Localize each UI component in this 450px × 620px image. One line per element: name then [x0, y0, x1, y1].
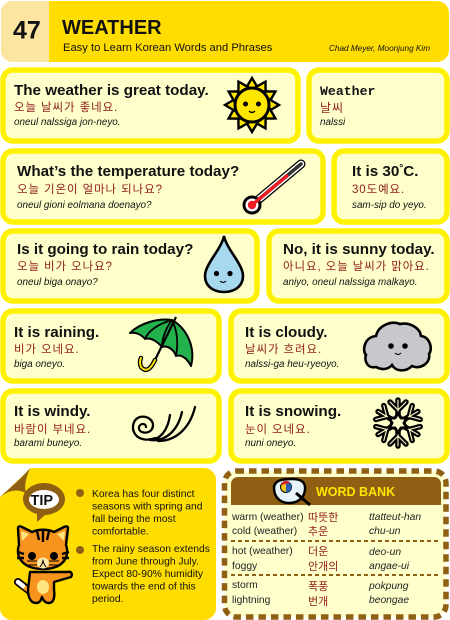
- word list: beongae: [369, 595, 409, 606]
- icon: cat: [17, 526, 72, 603]
- panel: it is raining: 비가 오네요.: [14, 343, 80, 356]
- word list: 폭풍: [308, 580, 328, 593]
- authors: Chad Meyer, Moonjung Kim: [329, 44, 430, 53]
- panel: it is cloudy: It is cloudy.: [245, 324, 327, 341]
- word list: pokpung: [368, 581, 409, 592]
- tip text 2: towards the end of this: [92, 582, 196, 592]
- panel: the weather is great today: The weather is great today.: [14, 82, 209, 99]
- panel: what's the temperature today: 오늘 기온이 얼마나 되나요?: [17, 182, 163, 196]
- word list: ttatteut-han: [369, 512, 421, 523]
- panel: it is 30 degrees: sam-sip do yeyo.: [352, 200, 427, 211]
- panel: it is snowing: nuni oneyo.: [245, 438, 296, 449]
- panel: it is raining: biga oneyo.: [14, 359, 65, 370]
- word list: 더운: [308, 545, 328, 558]
- word list: 따뜻한: [308, 511, 338, 524]
- panel: no it is sunny today: No, it is sunny today.: [283, 241, 435, 258]
- panel: it is 30 degrees: It is 30: [352, 163, 399, 180]
- panel: it is 30 degrees: [334, 151, 447, 222]
- word list: angae-ui: [369, 561, 410, 572]
- word list: foggy: [232, 561, 258, 572]
- panel: it is snowing: [231, 391, 447, 461]
- tip text 2: period.: [92, 594, 123, 605]
- panel: it is raining: It is raining.: [14, 324, 99, 341]
- panel: no it is sunny today: aniyo, oneul nalssiga malkayo.: [283, 277, 418, 288]
- icon: snowflake: [374, 400, 422, 446]
- panel: it is 30 degrees: C.: [403, 163, 418, 180]
- icon: cloud: [364, 323, 431, 370]
- panel: weather vocabulary: Weather: [320, 84, 375, 99]
- word list: deo-un: [369, 547, 401, 558]
- tip speech bubble: TIP: [30, 493, 53, 509]
- panel: it is windy: It is windy.: [14, 403, 91, 420]
- panel: it is windy: [3, 391, 219, 461]
- word list: cold (weather): [232, 526, 297, 537]
- icon: sun: [225, 78, 279, 132]
- tip text 1: seasons with spring and: [92, 502, 203, 512]
- panel: no it is sunny today: [269, 231, 447, 301]
- word bank heading: WORD BANK: [316, 485, 395, 499]
- icon: umbrella: [130, 317, 192, 370]
- panel: what's the temperature today: What’s the temperature today?: [17, 163, 239, 180]
- panel: it is cloudy: 날씨가 흐려요.: [245, 343, 322, 356]
- word list: 추운: [308, 525, 328, 538]
- panel: word bank: [224, 471, 446, 617]
- panel: the weather is great today: 오늘 날씨가 좋네요.: [14, 101, 118, 114]
- page curl: [0, 468, 30, 497]
- panel: is it going to rain today: Is it going to rain today?: [17, 241, 193, 258]
- icon: fan: [274, 479, 310, 505]
- panel: what's the temperature today: [3, 151, 323, 222]
- bullet 2: [76, 546, 84, 554]
- panel: the weather is great today: oneul nalssiga jon-neyo.: [14, 117, 121, 128]
- word list: storm: [232, 580, 258, 591]
- icon: water drop: [205, 236, 243, 292]
- panel: it is windy: 바람이 부네요.: [14, 423, 91, 436]
- panel: no it is sunny today: 아니요, 오늘 날씨가 맑아요.: [283, 259, 430, 273]
- word list: hot (weather): [232, 546, 293, 557]
- lesson number: 47: [13, 16, 41, 44]
- icon: thermometer: [242, 164, 301, 214]
- tip text 2: from June through July.: [92, 556, 199, 568]
- bullet 1: [76, 489, 84, 497]
- word list: 번개: [308, 595, 328, 608]
- word list: chu-un: [369, 526, 401, 537]
- panel: it is 30 degrees: °: [399, 163, 403, 174]
- panel: is it going to rain today: 오늘 비가 오나요?: [17, 260, 113, 273]
- panel: weather vocabulary: [309, 70, 447, 141]
- tip speech bubble: [23, 483, 65, 522]
- panel: the weather is great today: [3, 70, 298, 141]
- icon: wind: [133, 407, 195, 441]
- panel: what's the temperature today: oneul gioni eolmana doenayo?: [17, 200, 152, 211]
- panel: weather vocabulary: nalssi: [320, 117, 346, 128]
- tip text 2: Expect 80-90% humidity: [92, 569, 204, 580]
- tip text 1: fall being the most: [92, 514, 176, 525]
- panel: weather vocabulary: 날씨: [320, 101, 344, 115]
- title: WEATHER: [62, 17, 162, 39]
- panel: it is cloudy: nalssi-ga heu-ryeoyo.: [245, 359, 339, 370]
- word list: [231, 511, 421, 608]
- panel: it is snowing: It is snowing.: [245, 403, 341, 420]
- header: [1, 1, 449, 62]
- word list: lightning: [232, 595, 271, 606]
- panel: is it going to rain today: [3, 231, 257, 301]
- subtitle: Easy to Learn Korean Words and Phrases: [63, 42, 273, 54]
- word list: warm (weather): [231, 512, 304, 523]
- panel: it is raining: [3, 311, 219, 381]
- tip text 2: The rainy season extends: [92, 544, 210, 555]
- panel: tip: [0, 468, 216, 620]
- word list: 안개의: [308, 560, 338, 573]
- panel: it is windy: barami buneyo.: [14, 438, 82, 449]
- panel: it is cloudy: [231, 311, 447, 381]
- tip text 1: Korea has four distinct: [92, 489, 195, 500]
- panel: is it going to rain today: oneul biga onayo?: [17, 277, 98, 288]
- tip text 1: comfortable.: [92, 526, 149, 538]
- panel: it is 30 degrees: 30도예요.: [352, 183, 405, 196]
- panel: it is snowing: 눈이 오네요.: [245, 423, 311, 436]
